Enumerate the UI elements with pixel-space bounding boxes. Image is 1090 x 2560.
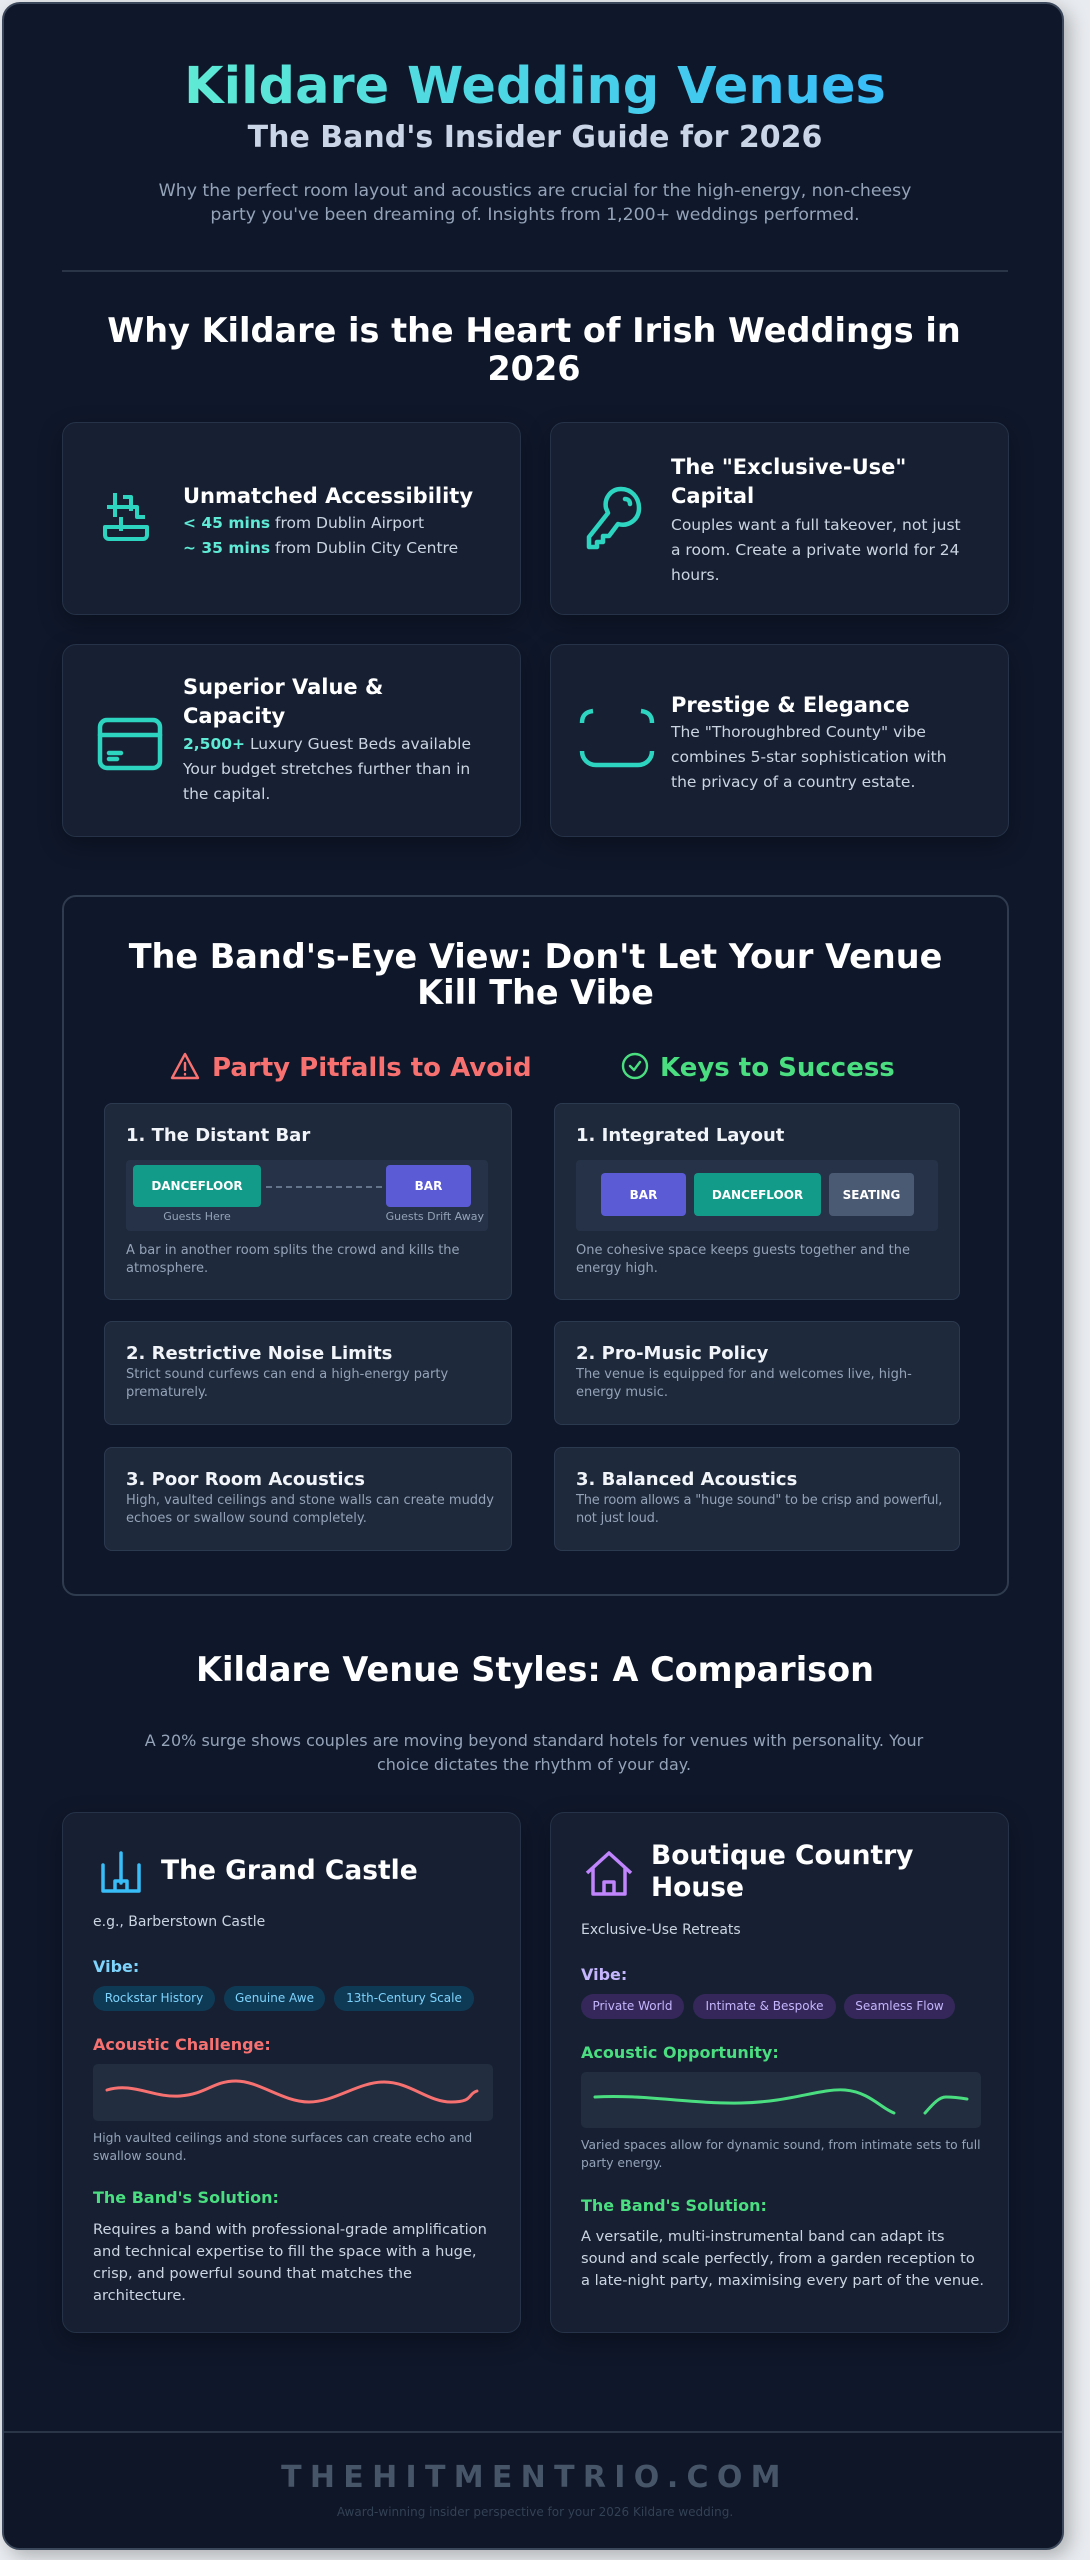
- heading: comparison: Kildare Venue Styles: A Comparison: [196, 1650, 874, 1689]
- panel: band's-eye view: [62, 895, 1009, 1596]
- diagram: integrated: DANCEFLOOR: [712, 1188, 803, 1202]
- card: grand castle: Vibe:: [93, 1957, 139, 1976]
- diagram: distant bar: DANCEFLOOR: [151, 1179, 243, 1193]
- comparison intro: A 20% surge shows couples are moving beyond standard hotels for venues with personality. Your choice dictates the rhythm of your day.: [145, 1731, 923, 1774]
- text: 2,500+ Luxury Guest Beds available Your budget stretches further than in the capital.: [183, 735, 471, 803]
- text: Unmatched Accessibility: [183, 484, 473, 508]
- column heading: keys: Keys to Success: [660, 1053, 895, 1083]
- pitfall 3: 3. Poor Room Acoustics: [126, 1469, 365, 1490]
- footer tagline: Award-winning insider perspective for your 2026 Kildare wedding.: [337, 2505, 733, 2519]
- card: grand castle: e.g., Barberstown Castle: [93, 1914, 265, 1930]
- diagram: integrated: [576, 1160, 938, 1231]
- column heading: pitfalls: Party Pitfalls to Avoid: [212, 1053, 532, 1083]
- subtitle: The Band's Insider Guide for 2026: [248, 120, 822, 155]
- diagram: distant bar: [126, 1160, 488, 1231]
- success 2: [554, 1321, 960, 1425]
- card: grand castle: Requires a band with professional-grade amplification and technical expertise to fill the space with a huge, crisp, and powerful sound that matches the architecture.: [93, 2221, 487, 2304]
- diagram: integrated: SEATING: [843, 1188, 900, 1202]
- text: < 45 mins from Dublin Airport: [183, 514, 424, 532]
- card: accessibility: [62, 422, 521, 615]
- tags: Intimate & Bespoke: [705, 1999, 824, 2013]
- success 2: The venue is equipped for and welcomes live, high-energy music.: [576, 1367, 912, 1400]
- text: [671, 455, 961, 584]
- card: grand castle: The Grand Castle: [161, 1855, 418, 1886]
- wave chart: green: [581, 2072, 981, 2128]
- card: boutique country house: Acoustic Opportunity:: [581, 2043, 779, 2062]
- pitfall 3: [104, 1447, 512, 1551]
- text: [670, 693, 947, 791]
- text: The "Thoroughbred County" vibe combines 5-star sophistication with the privacy of a country estate.: [671, 723, 947, 791]
- success 2: 2. Pro-Music Policy: [576, 1343, 768, 1364]
- pitfall 2: [104, 1321, 512, 1425]
- icon: key: [586, 486, 642, 550]
- card: exclusive use: [550, 422, 1009, 615]
- text: [183, 484, 473, 557]
- tags: Seamless Flow: [855, 1999, 944, 2013]
- text: Couples want a full takeover, not just a room. Create a private world for 24 hours.: [671, 516, 961, 584]
- pitfall 1: A bar in another room splits the crowd and kills the atmosphere.: [126, 1243, 460, 1276]
- footer: [4, 2431, 1066, 2556]
- tags: 13th-Century Scale: [346, 1991, 462, 2005]
- success 1: 1. Integrated Layout: [576, 1125, 784, 1146]
- tags: Rockstar History: [105, 1991, 203, 2005]
- heading: The Band's-Eye View: Don't Let Your Venue Kill The Vibe: [129, 937, 942, 1012]
- success 3: [554, 1447, 960, 1551]
- pitfall 2: Strict sound curfews can end a high-energy party prematurely.: [126, 1367, 448, 1400]
- tags: Genuine Awe: [235, 1991, 314, 2005]
- card: boutique country house: A versatile, multi-instrumental band can adapt its sound and scale perfectly, from a garden reception to a late-night party, maximising every part of the venue.: [581, 2228, 984, 2289]
- wave chart: red: [93, 2064, 493, 2121]
- title: Kildare Wedding Venues: [184, 57, 886, 116]
- diagram: distant bar: Guests Drift Away: [386, 1210, 484, 1223]
- icon: house: [586, 1851, 632, 1896]
- tags: [581, 1994, 955, 2019]
- tags: Private World: [592, 1999, 673, 2013]
- text: The "Exclusive-Use" Capital: [671, 455, 906, 508]
- tags: [93, 1986, 474, 2011]
- text: Superior Value & Capacity: [183, 675, 383, 728]
- icon: frame corners: [580, 708, 654, 768]
- card: boutique country house: Boutique Country House: [651, 1840, 913, 1903]
- card: grand castle: High vaulted ceilings and stone surfaces can create echo and swallow sound.: [93, 2131, 472, 2163]
- card: grand castle: Acoustic Challenge:: [93, 2035, 271, 2054]
- success 3: 3. Balanced Acoustics: [576, 1469, 797, 1490]
- footer brand: THEHITMENTRIO.COM: [281, 2460, 789, 2495]
- card: grand castle: The Band's Solution:: [93, 2188, 279, 2207]
- success 1: One cohesive space keeps guests together and the energy high.: [576, 1243, 910, 1276]
- icon: credit card: [98, 718, 162, 770]
- card: boutique country house: Varied spaces allow for dynamic sound, from intimate sets to full party energy.: [581, 2138, 981, 2170]
- diagram: distant bar: BAR: [415, 1179, 442, 1193]
- text: ~ 35 mins from Dublin City Centre: [183, 539, 458, 557]
- success 3: The room allows a "huge sound" to be crisp and powerful, not just loud.: [576, 1493, 942, 1526]
- card: boutique country house: Exclusive-Use Retreats: [581, 1922, 741, 1938]
- text: Prestige & Elegance: [671, 693, 910, 717]
- intro text: Why the perfect room layout and acoustics are crucial for the high-energy, non-cheesy party you've been dreaming of. Insights from 1,200+ weddings performed.: [159, 181, 911, 225]
- success 1: [554, 1103, 960, 1300]
- icon: accessibility: [103, 493, 149, 541]
- diagram: distant bar: Guests Here: [163, 1210, 231, 1223]
- pitfall 2: 2. Restrictive Noise Limits: [126, 1343, 392, 1364]
- card: boutique country house: [550, 1812, 1009, 2333]
- pitfall 1: [104, 1103, 512, 1300]
- icon: castle: [101, 1851, 141, 1893]
- text: [183, 675, 471, 803]
- card: prestige: [550, 644, 1009, 837]
- diagram: integrated: BAR: [630, 1188, 657, 1202]
- card: grand castle: [62, 1812, 521, 2333]
- heading: why kildare: Why Kildare is the Heart of Irish Weddings in 2026: [107, 311, 961, 388]
- pitfall 3: High, vaulted ceilings and stone walls can create muddy echoes or swallow sound completely.: [126, 1493, 494, 1526]
- card: boutique country house: Vibe:: [581, 1965, 627, 1984]
- card: boutique country house: The Band's Solution:: [581, 2196, 767, 2215]
- pitfall 1: 1. The Distant Bar: [126, 1125, 310, 1146]
- card: value: [62, 644, 521, 837]
